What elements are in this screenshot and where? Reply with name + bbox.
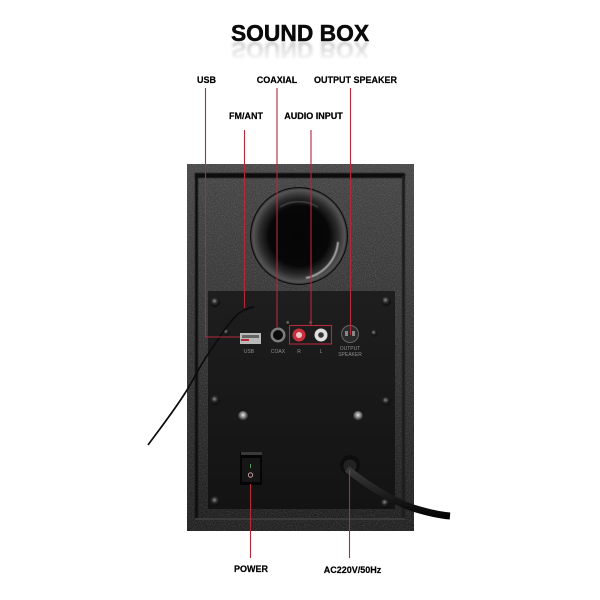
callout: COAXIAL: COAXIAL	[257, 75, 298, 85]
coax jack	[270, 328, 286, 355]
RCA L jack: L	[320, 349, 323, 355]
callout: USB	[197, 75, 240, 337]
RCA R jack	[292, 328, 306, 355]
callout: AC220V/50Hz	[324, 470, 382, 575]
output speaker socket: SPEAKER	[338, 352, 362, 358]
power cord	[347, 469, 450, 516]
rear panel	[208, 291, 395, 509]
RCA L jack	[314, 328, 328, 355]
callout: FM/ANT: FM/ANT	[229, 111, 263, 121]
callout: AUDIO INPUT	[284, 111, 343, 344]
output speaker socket	[338, 326, 362, 358]
speaker cabinet	[187, 164, 414, 531]
callout: USB: USB	[197, 75, 216, 85]
title: SOUND BOX	[231, 20, 369, 46]
USB port	[240, 333, 261, 355]
coax jack: COAX	[271, 349, 286, 355]
callout: AUDIO INPUT: AUDIO INPUT	[284, 111, 343, 121]
title	[231, 20, 369, 63]
callout: POWER	[234, 484, 268, 574]
power switch	[240, 452, 262, 485]
USB port: USB	[244, 349, 255, 355]
antenna wire	[148, 307, 254, 445]
cabinet recess	[195, 173, 405, 520]
callout: POWER: POWER	[234, 564, 268, 574]
power socket	[340, 455, 360, 475]
callout: AC220V/50Hz: AC220V/50Hz	[324, 565, 382, 575]
output speaker socket: OUTPUT	[340, 346, 360, 352]
bass port	[250, 188, 348, 284]
RCA R jack: R	[297, 349, 301, 355]
screws	[210, 296, 391, 508]
callout: OUTPUT SPEAKER: OUTPUT SPEAKER	[314, 75, 398, 85]
title reflection: SOUND BOX	[231, 37, 369, 63]
